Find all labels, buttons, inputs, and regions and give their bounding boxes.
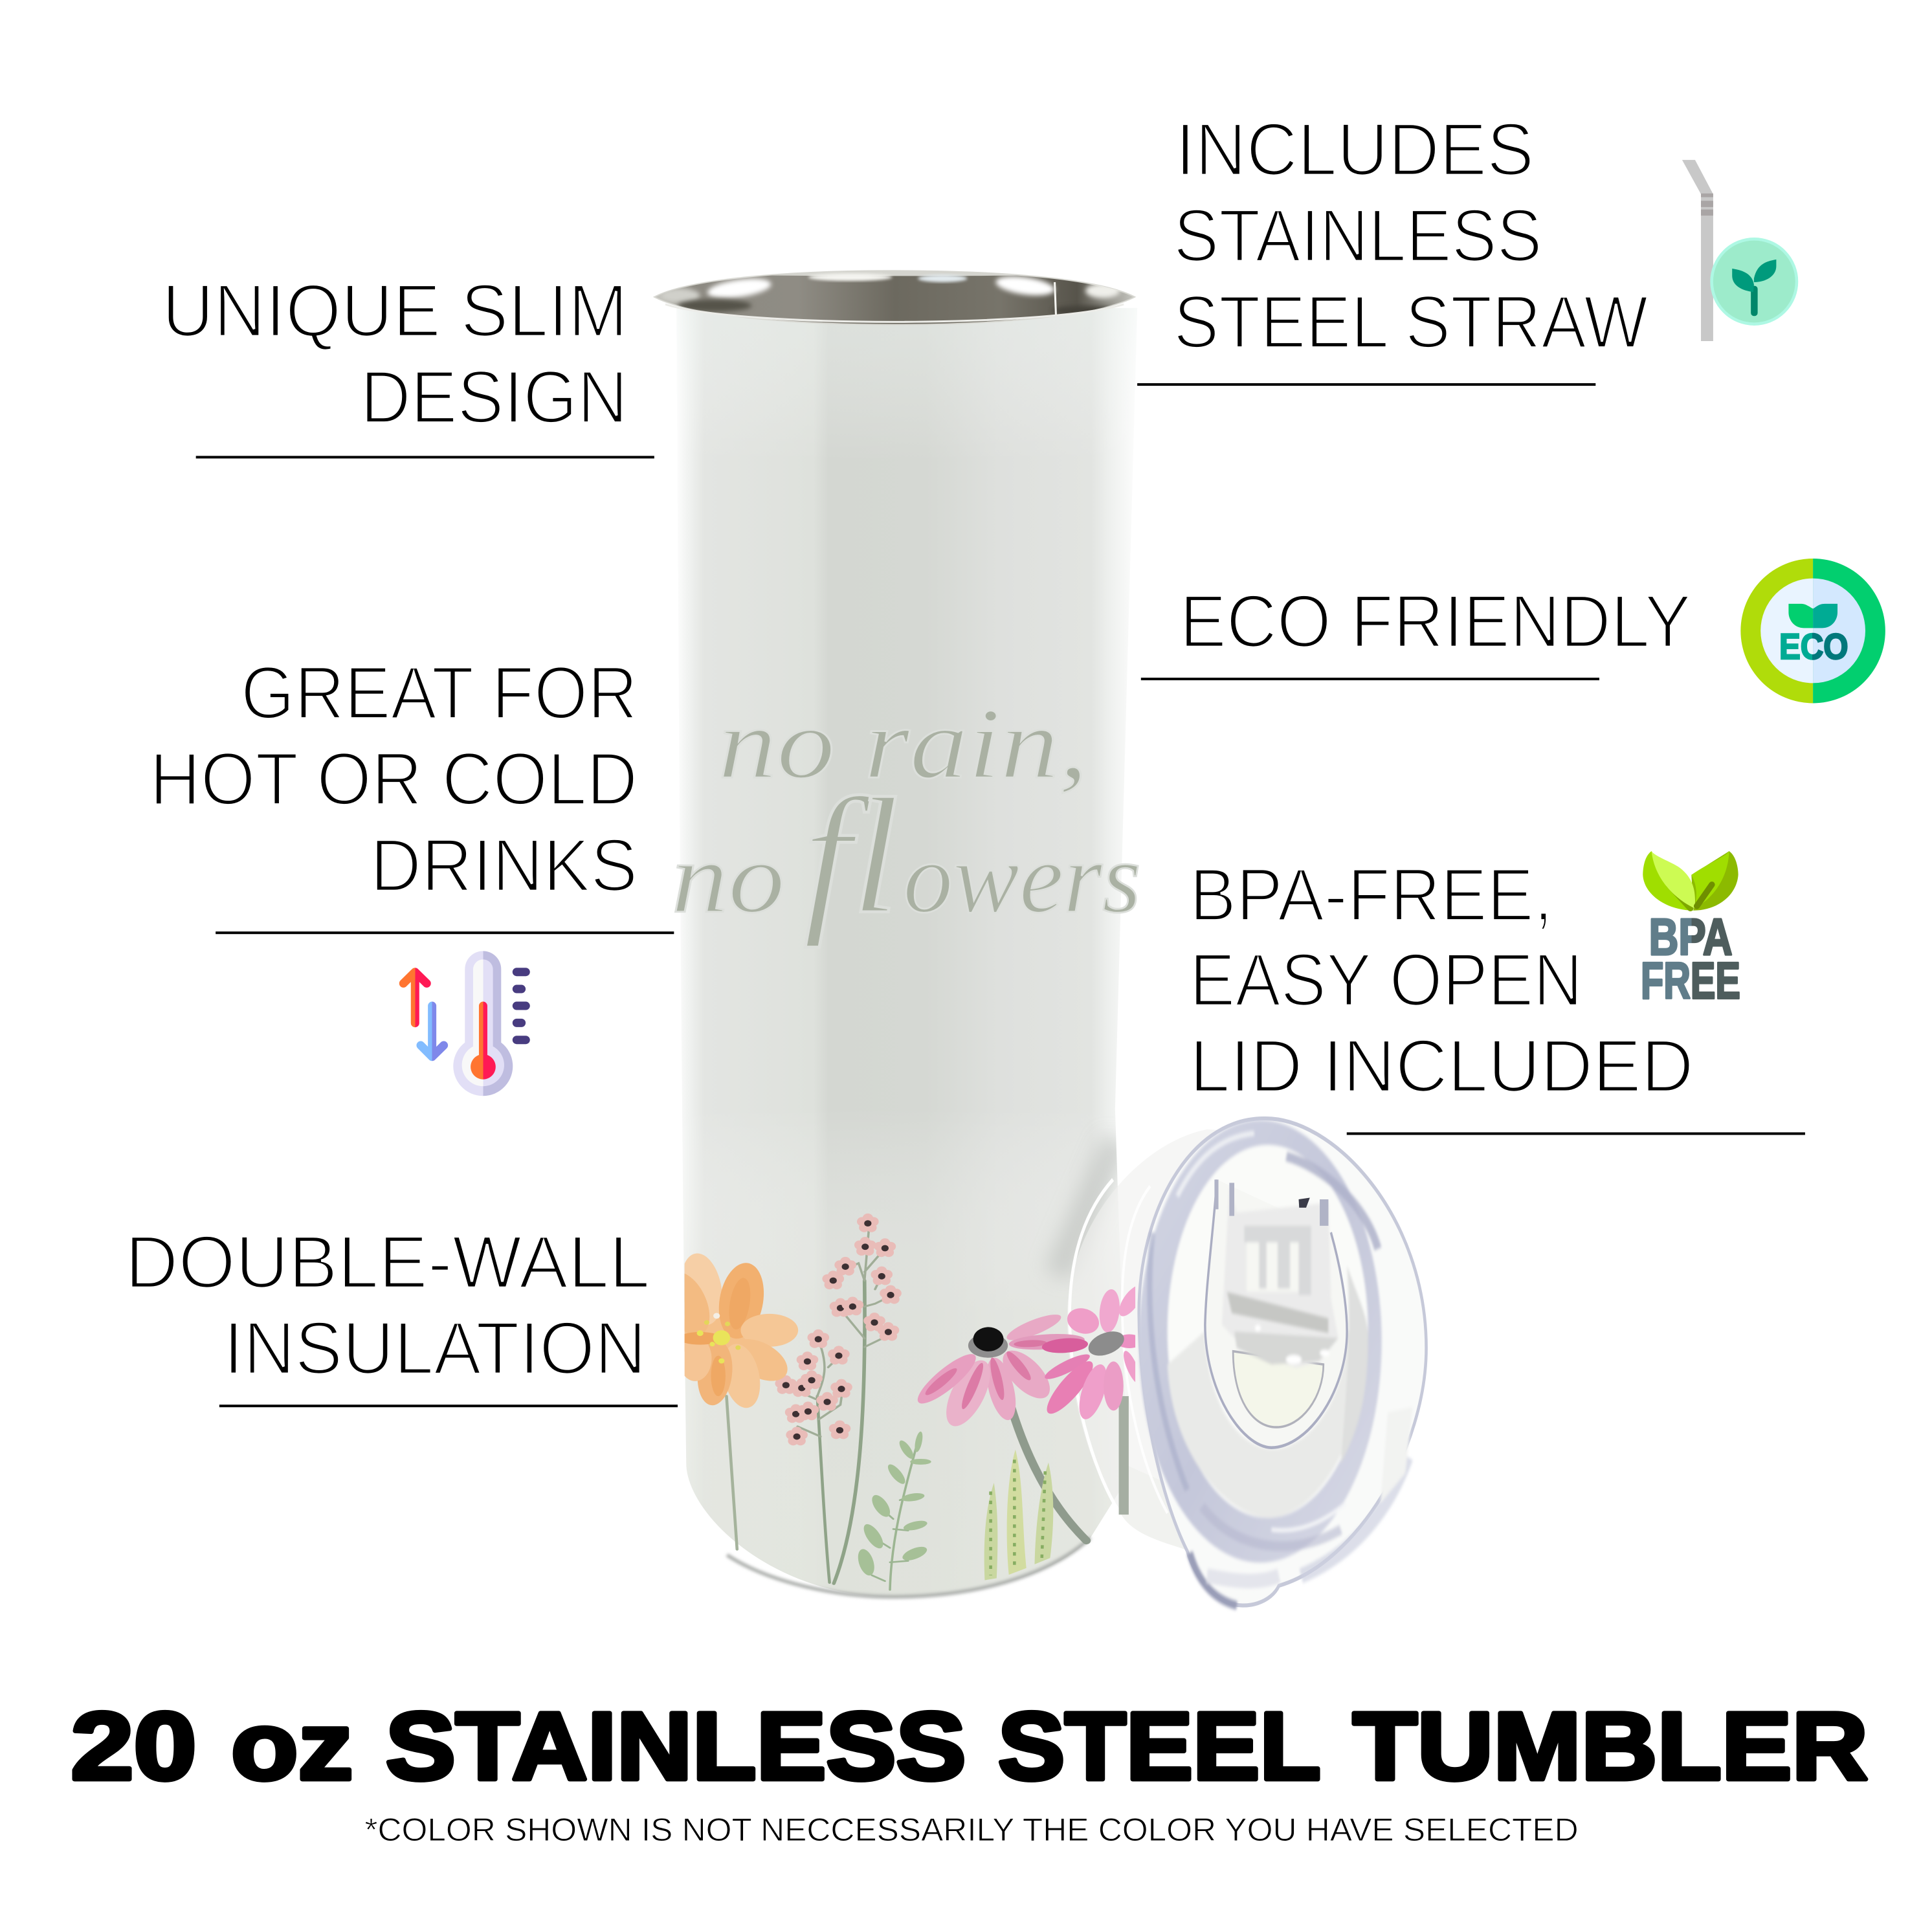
tumbler rim xyxy=(654,270,1135,325)
footnote: *COLOR SHOWN IS NOT NECCESSARILY THE COLOR YOU HAVE SELECTED xyxy=(364,1811,1579,1848)
icon: eco badge: ECO xyxy=(1779,627,1849,667)
lid ring shading xyxy=(1139,1120,1413,1606)
tumbler script text: no rain, no flowers xyxy=(672,687,1141,948)
label: includes stainless steel straw: STAINLESS xyxy=(1173,195,1542,278)
label: bpa-free easy open lid included xyxy=(1190,854,1805,1135)
label: great for hot or cold drinks: HOT OR COLD xyxy=(150,738,638,821)
label: bpa-free easy open lid included: EASY OPEN xyxy=(1190,938,1582,1021)
pink daisy seen through lid xyxy=(1040,1282,1148,1515)
title: TUMBLER xyxy=(1353,1693,1868,1800)
fern leaves xyxy=(855,1431,931,1577)
label: double-wall insulation xyxy=(125,1221,678,1407)
title: oz xyxy=(231,1693,353,1800)
floral artwork on tumbler xyxy=(655,1214,1148,1590)
tumbler script text: no rain, no flowers: owers xyxy=(903,822,1141,934)
label: includes stainless steel straw: STEEL STRAW xyxy=(1173,281,1648,364)
tumbler script text: no rain, no flowers: fl xyxy=(803,764,900,948)
label: bpa-free easy open lid included: BPA-FREE, xyxy=(1190,854,1553,937)
icon: bpa free leaves: BPA xyxy=(1649,908,1733,966)
tumbler script text: no rain, no flowers: no xyxy=(672,822,785,934)
label: unique slim design: UNIQUE SLIM xyxy=(162,270,628,353)
icon: bpa free leaves xyxy=(1641,851,1740,1009)
label: double-wall insulation: DOUBLE-WALL xyxy=(125,1221,650,1304)
grass blades xyxy=(984,1450,1053,1580)
label: great for hot or cold drinks xyxy=(150,652,674,934)
flower stems and branches xyxy=(726,1226,1087,1590)
icon: eco badge xyxy=(1740,559,1885,703)
label: great for hot or cold drinks: DRINKS xyxy=(370,824,638,907)
tumbler script text: no rain, no flowers: no rain, xyxy=(718,687,1088,799)
title: 20 xyxy=(71,1693,197,1800)
lid slider xyxy=(1222,1186,1338,1368)
clear tumbler lid xyxy=(1067,1118,1427,1606)
pink blossoms xyxy=(775,1214,902,1445)
icon: bpa free leaves: FREE xyxy=(1641,951,1740,1009)
label: includes stainless steel straw: INCLUDES xyxy=(1175,108,1534,191)
orange flower xyxy=(685,1253,799,1408)
label: bpa-free easy open lid included: LID INCLUDED xyxy=(1190,1025,1694,1108)
pink daisy with dark centre xyxy=(918,1315,1085,1427)
label: unique slim design xyxy=(162,270,654,458)
label: unique slim design: DESIGN xyxy=(361,356,628,439)
title: STEEL xyxy=(998,1693,1321,1800)
icon: thermometer with hot and cold arrows xyxy=(403,951,526,1096)
label: double-wall insulation: INSULATION xyxy=(224,1307,646,1390)
label: eco friendly: ECO FRIENDLY xyxy=(1180,580,1691,663)
title xyxy=(71,1693,1868,1800)
icon: steel straw with green sprout xyxy=(1682,160,1797,341)
tumbler body xyxy=(676,308,1137,1597)
label: includes stainless steel straw xyxy=(1137,108,1648,386)
label: great for hot or cold drinks: GREAT FOR xyxy=(241,652,638,735)
title: STAINLESS xyxy=(386,1693,966,1800)
